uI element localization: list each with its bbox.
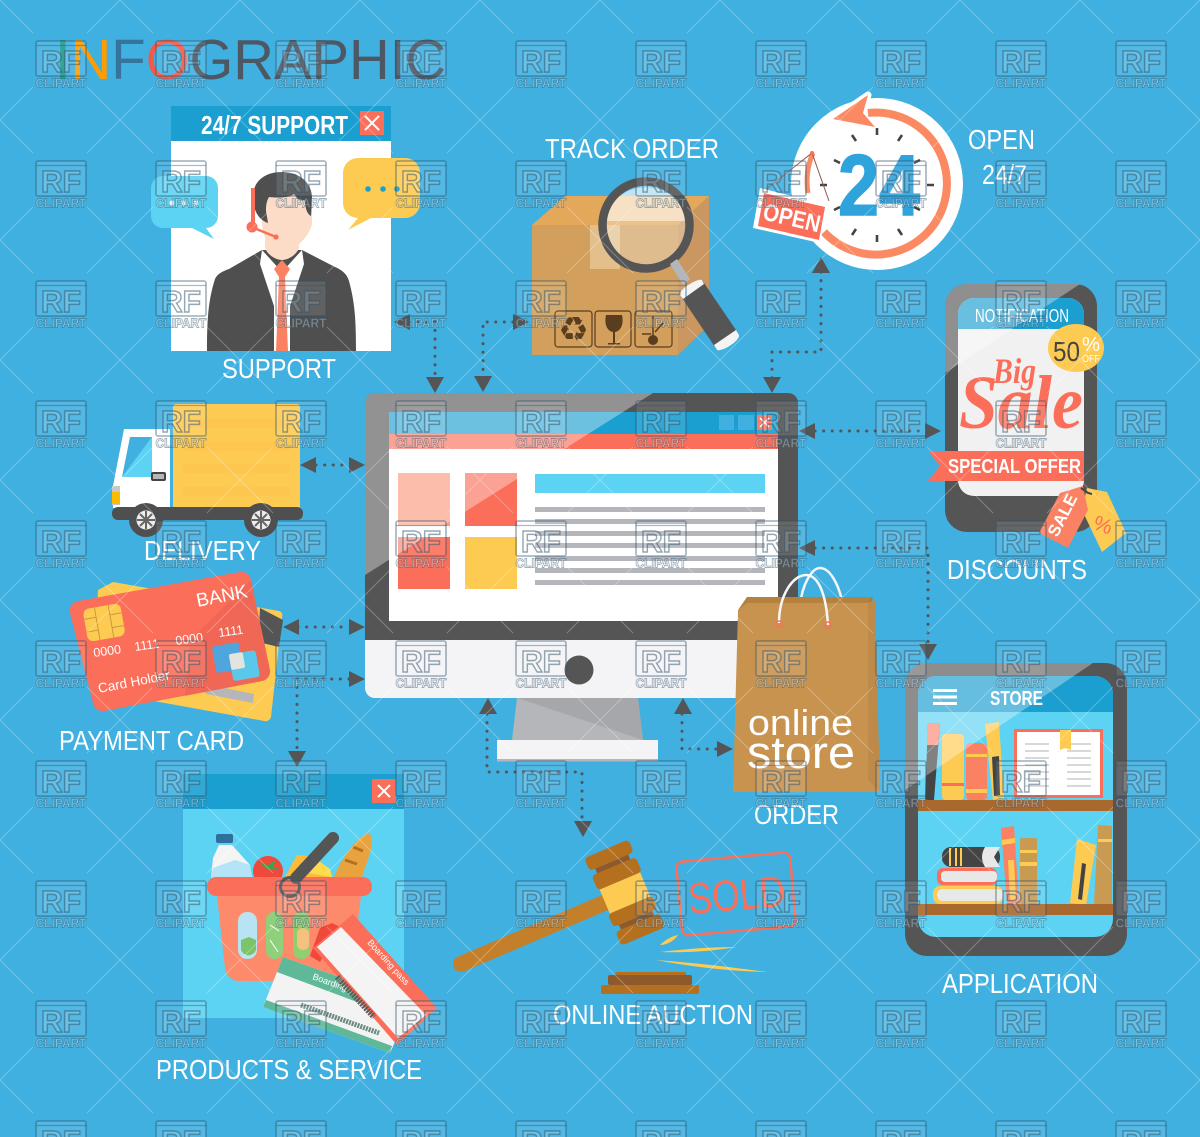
gavel head — [584, 839, 665, 946]
arrow: payment to monitor — [283, 619, 365, 635]
card chip — [83, 603, 126, 642]
panel: discounts phone — [928, 284, 1126, 552]
clock ticks — [820, 128, 934, 242]
arrow: order to monitor — [674, 698, 733, 757]
50% off badge — [1048, 324, 1104, 372]
card numbers: 1111 — [217, 623, 244, 640]
arrow: open to monitor — [763, 257, 830, 393]
panel: support — [151, 106, 420, 351]
camera dot — [564, 656, 594, 684]
arrow: products to monitor — [288, 671, 365, 767]
notification text: NOTIFICATION — [975, 306, 1069, 326]
card numbers — [92, 623, 244, 660]
truck cab — [112, 429, 170, 508]
truck cargo — [173, 404, 300, 509]
panel: application tablet — [905, 663, 1127, 956]
monitor chin — [365, 640, 798, 698]
card logo — [212, 642, 260, 681]
sale tags: % — [1090, 511, 1116, 539]
open sign: OPEN — [760, 199, 823, 238]
wheels — [129, 503, 278, 537]
lower shelf books — [933, 825, 1112, 905]
big 24: 24 — [838, 138, 920, 234]
online store text: store — [747, 727, 855, 778]
magnifier — [602, 182, 739, 350]
screen accent bar — [389, 434, 778, 449]
chat bubble yellow — [343, 158, 420, 230]
support title text: 24/7 SUPPORT — [201, 110, 348, 140]
monitor stand — [497, 698, 658, 762]
fragile icon — [605, 315, 623, 344]
bag handles back — [800, 568, 845, 620]
upper shelf books — [925, 722, 1004, 800]
special offer ribbon: SPECIAL OFFER — [948, 456, 1081, 478]
label: products and service: PRODUCTS & SERVICE — [156, 1054, 422, 1085]
50% off badge: 50 — [1053, 336, 1080, 367]
label: open 24/7: OPEN — [968, 124, 1035, 155]
label: order: ORDER — [754, 799, 839, 830]
label: online auction: ONLINE AUCTION — [553, 999, 753, 1030]
red boarding ticket — [313, 914, 437, 1045]
arrow: discounts to monitor — [799, 423, 941, 439]
sale tags — [1039, 486, 1126, 552]
arrow: track order to monitor — [474, 314, 529, 392]
clock arc — [824, 113, 947, 255]
upper shelf — [918, 800, 1113, 811]
monitor gloss — [365, 393, 653, 575]
yellow back card — [93, 582, 283, 721]
label: payment card: PAYMENT CARD — [59, 725, 244, 756]
phone gloss — [945, 284, 1080, 373]
gavel handle — [461, 903, 604, 964]
panel: track order box — [532, 182, 739, 355]
card numbers: 1111 — [133, 637, 160, 654]
handling icons — [555, 311, 672, 347]
big sale text: Big — [992, 351, 1036, 391]
big sale text: Sale — [959, 361, 1083, 445]
monitor frame — [365, 393, 798, 640]
basket slots — [238, 912, 310, 959]
gavel base — [601, 972, 699, 994]
groceries — [253, 833, 372, 886]
milk bottle — [211, 834, 252, 878]
tablet gloss — [905, 663, 1093, 790]
screen title bar — [389, 412, 778, 434]
arrow: application to monitor — [799, 540, 937, 660]
panel: delivery truck — [112, 404, 303, 537]
online store text — [747, 702, 855, 778]
impact sparks — [656, 935, 767, 972]
label: application: APPLICATION — [942, 968, 1098, 999]
basket rim — [207, 877, 372, 896]
panel: online store bag — [733, 568, 880, 792]
card numbers: 0000 — [174, 630, 204, 648]
online store text: online — [748, 702, 853, 743]
bank text: BANK — [195, 581, 250, 612]
label: open 24/7 — [968, 124, 1035, 190]
open sign — [753, 151, 829, 243]
close icon — [372, 779, 396, 803]
arrow: support to monitor — [394, 314, 444, 393]
support title bar — [171, 106, 391, 141]
panel: products and service — [183, 774, 437, 1053]
basket handle — [280, 838, 333, 896]
window buttons — [719, 415, 772, 430]
red boarding ticket: Boarding pass — [366, 938, 412, 987]
card holder text: Card Holder — [97, 667, 172, 696]
red front card — [70, 572, 270, 711]
title: INFOGRAPHIC — [55, 28, 446, 92]
label: open 24/7: 24/7 — [982, 159, 1027, 190]
content tiles — [398, 473, 517, 589]
content text lines — [535, 507, 765, 585]
menu icon — [933, 689, 957, 705]
50% off badge: % — [1082, 334, 1100, 356]
content heading bar — [535, 474, 765, 493]
agent figure — [207, 172, 356, 351]
green boarding ticket — [263, 957, 412, 1053]
chart: monitor — [365, 393, 798, 762]
panel: open 24/7 clock — [753, 95, 963, 270]
lower shelf — [918, 904, 1113, 915]
bag body — [733, 600, 880, 792]
special offer ribbon — [928, 451, 1084, 481]
label: delivery: DELIVERY — [144, 535, 261, 566]
truck chassis — [112, 507, 303, 520]
connector arrows — [283, 257, 941, 837]
label: support: SUPPORT — [222, 353, 336, 384]
basket body — [217, 896, 361, 981]
panel: online auction — [461, 839, 796, 994]
store text: STORE — [990, 688, 1043, 710]
arrow: auction to monitor — [479, 698, 592, 837]
open book — [1014, 729, 1103, 798]
panel: payment card — [70, 572, 283, 721]
label: track order: TRACK ORDER — [545, 133, 719, 164]
label: discounts: DISCOUNTS — [947, 554, 1087, 585]
bag side fold — [868, 600, 880, 792]
card numbers: 0000 — [92, 642, 122, 660]
sale tags: SALE — [1044, 491, 1081, 540]
green boarding ticket: Boarding pass — [311, 971, 369, 1001]
close icon — [360, 111, 384, 135]
arrow: delivery to monitor — [300, 457, 365, 473]
temperature icon — [642, 316, 663, 345]
sold stamp: SOLD — [686, 867, 787, 924]
50% off badge: OFF — [1082, 354, 1100, 365]
screen body — [389, 449, 778, 621]
bag handle front — [776, 575, 831, 628]
chat bubble blue — [151, 176, 218, 239]
recycle icon: ♻ — [558, 310, 589, 350]
sold stamp — [676, 852, 796, 936]
tomato and pepper behind ticket — [310, 923, 340, 962]
products title bar — [183, 774, 404, 809]
bag flap — [739, 597, 873, 610]
